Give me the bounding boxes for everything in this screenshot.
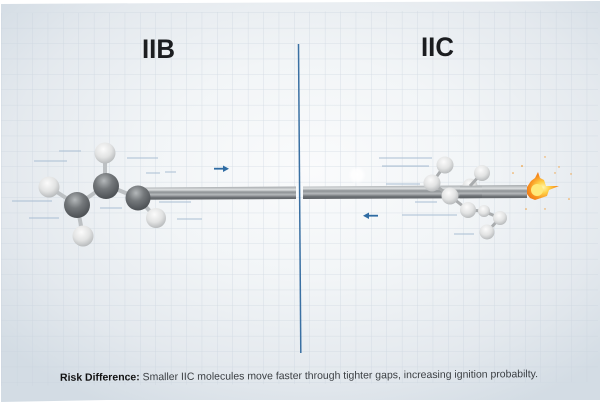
soft glow: [348, 166, 366, 184]
central divider line: [298, 44, 301, 353]
heading: IIC: IIC: [421, 32, 454, 62]
rod overlay in front of hidden atom: [460, 186, 482, 198]
rod: right segment: [303, 185, 527, 199]
icon: ignition spark: [512, 156, 572, 210]
speed lines: IIC: [379, 158, 474, 234]
molecule: IIC: [424, 156, 507, 240]
arrow: right: [214, 166, 229, 172]
arrow: left: [363, 212, 378, 219]
heading: IIB: IIB: [142, 34, 175, 64]
caption: risk difference: Risk Difference: Smaller IIC molecules move faster through tighter gaps, increasing ignition probabilty.: [60, 368, 538, 384]
speed lines: IIB: [12, 151, 202, 219]
molecule: IIC behind rod: [462, 178, 478, 194]
molecule: IIB: [38, 142, 166, 246]
rod: left segment: [140, 186, 296, 200]
